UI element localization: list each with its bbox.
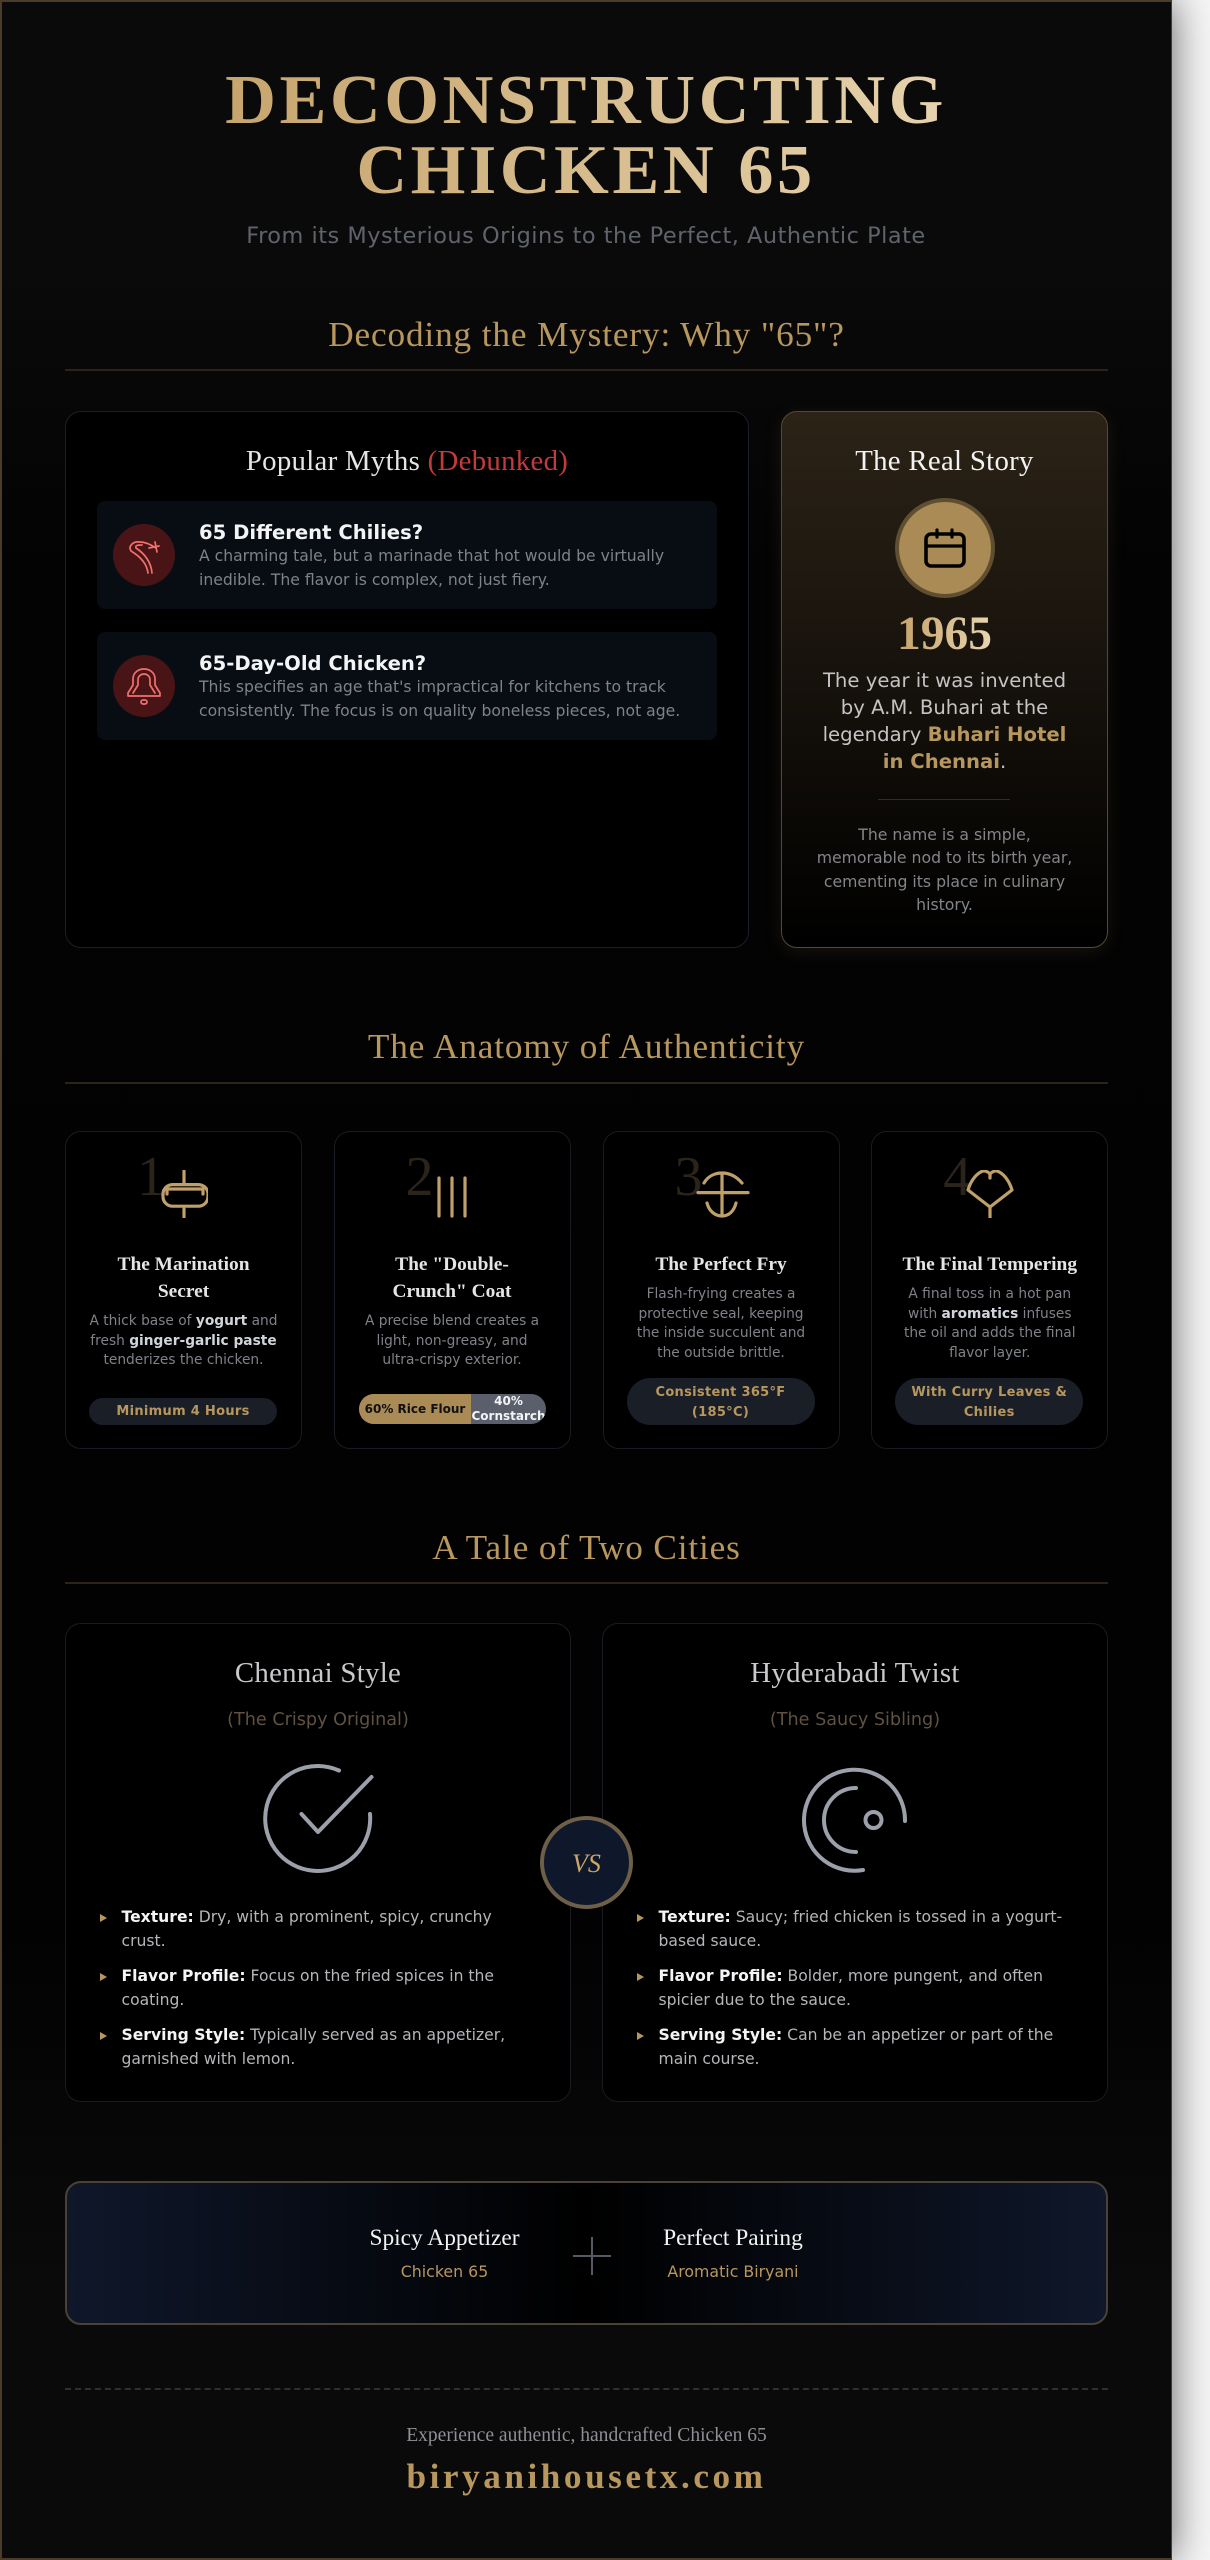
heading: anatomy: The Anatomy of Authenticity [368,1027,805,1066]
step title: Crunch" Coat [392,1280,512,1302]
myth title: 65 Different Chilies? [199,521,423,544]
pairing name: Aromatic Biryani [667,2262,799,2281]
step text: A final toss in a hot pan [908,1286,1071,1302]
vs badge [540,1816,633,1909]
footer [406,2425,767,2496]
step card 3 [602,1131,840,1449]
divider [878,799,1010,800]
step text [365,1313,539,1368]
callout: (185°C) [692,1404,749,1420]
story text: by A.M. Buhari at the [841,696,1048,719]
icon: check [263,1764,374,1873]
step text [89,1313,278,1368]
subtitle: From its Mysterious Origins to the Perfect, Authentic Plate [246,223,926,249]
step text [904,1286,1076,1360]
callout [89,1398,277,1425]
step text: the inside succulent and [637,1325,805,1341]
story note: memorable nod to its birth year, [817,848,1072,867]
heading: two cities: A Tale of Two Cities [432,1528,741,1567]
myth text: A charming tale, but a marinade that hot would be virtually [199,547,664,565]
callout: With Curry Leaves & [911,1385,1067,1400]
callout [895,1378,1083,1425]
list: chennai: Serving Style: Typically served as an appetizer, [122,2026,505,2044]
myths heading: Popular Myths (Debunked) [246,445,568,477]
icon: sauce swirl [802,1768,907,1873]
story note: The name is a simple, [858,825,1031,844]
panel: chennai style [65,1623,571,2102]
chennai heading: Chennai Style [235,1657,401,1689]
year: 1965 [897,608,992,660]
icon: calendar [895,498,995,598]
story text: in Chennai. [883,750,1006,773]
callout: Minimum 4 Hours [116,1404,250,1419]
cornstarch segment [471,1394,546,1423]
rice flour segment: 60% Rice Flour [365,1402,465,1416]
step card 4 [871,1131,1108,1449]
panel: the real story [781,411,1108,948]
rice flour segment [359,1394,471,1424]
step card 1 [65,1131,302,1449]
list: hyderabadi: Flavor Profile: Bolder, more pungent, and often [658,1967,1043,1985]
icon: tempering leaf [966,1170,1014,1218]
list: hyderabadi: Serving Style: Can be an appetizer or part of the [658,2026,1053,2044]
hyderabadi subtitle: (The Saucy Sibling) [770,1710,940,1730]
title: DECONSTRUCTING [225,61,947,139]
step text: tenderizes the chicken. [103,1352,264,1368]
step title: The "Double- [395,1254,509,1274]
step title: Secret [158,1280,209,1302]
callout: Consistent 365°F [655,1385,786,1400]
myth text: This specifies an age that's impractical for kitchens to track [199,678,666,696]
step text: fresh ginger-garlic paste [90,1332,277,1348]
step text: ultra-crispy exterior. [382,1352,522,1368]
step title [118,1254,250,1302]
icon: coat [437,1176,467,1218]
appetizer name: Chicken 65 [401,2262,488,2281]
step text: Flash-frying creates a [647,1286,795,1302]
step text: flavor layer. [949,1344,1030,1360]
step text: A precise blend creates a [365,1313,539,1329]
pairing label: Perfect Pairing [663,2225,803,2251]
story note [817,825,1072,914]
list: hyderabadi: main course. [658,2050,760,2068]
panel: hyderabadi twist [602,1623,1108,2102]
appetizer label: Spicy Appetizer [369,2225,520,2251]
list: chennai: crust. [122,1932,166,1950]
step card 2 [334,1131,570,1449]
myth title: 65-Day-Old Chicken? [199,652,426,675]
chennai subtitle: (The Crispy Original) [227,1710,409,1730]
title [186,65,986,205]
myth: 65 chilies [97,501,717,609]
icon: plus [573,2237,611,2275]
real story heading: The Real Story [855,445,1034,477]
cornstarch segment: Cornstarch [471,1409,546,1423]
callout: Chilies [964,1404,1015,1420]
number 1: 1 [137,1146,165,1208]
myth text [198,678,680,720]
step title: The Perfect Fry [655,1254,787,1274]
list: chennai: Flavor Profile: Focus on the fried spices in the [122,1967,494,1985]
story note: cementing its place in culinary [824,872,1065,890]
pairing banner [65,2181,1108,2325]
number 4: 4 [943,1146,971,1208]
story note: history. [916,895,973,914]
callout [626,1378,814,1425]
list: hyderabadi [637,1908,1062,2068]
step text: light, non-greasy, and [377,1332,527,1348]
list: chennai: garnished with lemon. [122,2050,295,2068]
story text: legendary Buhari Hotel [823,723,1066,746]
myth text: consistently. The focus is on quality boneless pieces, not age. [199,702,680,720]
list: hyderabadi: Texture: Saucy; fried chicken is tossed in a yogurt- [658,1908,1062,1926]
story text: The year it was invented [823,668,1066,692]
number 2: 2 [406,1146,434,1208]
list: chennai: coating. [122,1991,184,2009]
step text: the outside brittle. [657,1344,785,1360]
heading: decoding the mystery: Decoding the Mystery: Why "65"? [328,314,845,354]
step text: A thick base of yogurt and [89,1313,278,1329]
icon: marination [161,1170,208,1218]
story text [822,668,1066,773]
step title: The Final Tempering [902,1254,1077,1274]
step title: The Marination [118,1254,249,1274]
step text: the oil and adds the final [904,1325,1076,1341]
vs badge: VS [572,1849,601,1878]
step text: with aromatics infuses [908,1306,1072,1322]
list: hyderabadi: based sauce. [658,1932,761,1950]
step text [637,1286,805,1360]
ratio bar [359,1394,546,1424]
footer website: biryanihousetx.com [406,2457,767,2496]
list: hyderabadi: spicier due to the sauce. [658,1991,851,2009]
number 3: 3 [674,1146,702,1208]
list: chennai: Texture: Dry, with a prominent, spicy, crunchy [122,1908,492,1926]
panel: popular myths [65,411,749,948]
step title [392,1254,512,1302]
footer tagline: Experience authentic, handcrafted Chicken 65 [406,2425,767,2446]
myth text: inedible. The flavor is complex, not just fiery. [199,570,550,588]
myth: 65 day old [97,632,717,740]
step text: protective seal, keeping [638,1306,804,1322]
title: CHICKEN 65 [356,131,816,209]
icon: chili [113,524,175,586]
cornstarch segment: 40% [494,1394,523,1408]
list: chennai [100,1908,505,2068]
hyderabadi heading: Hyderabadi Twist [750,1657,960,1689]
icon: bell [113,655,175,717]
myth text [199,547,664,588]
icon: fry [696,1171,750,1218]
